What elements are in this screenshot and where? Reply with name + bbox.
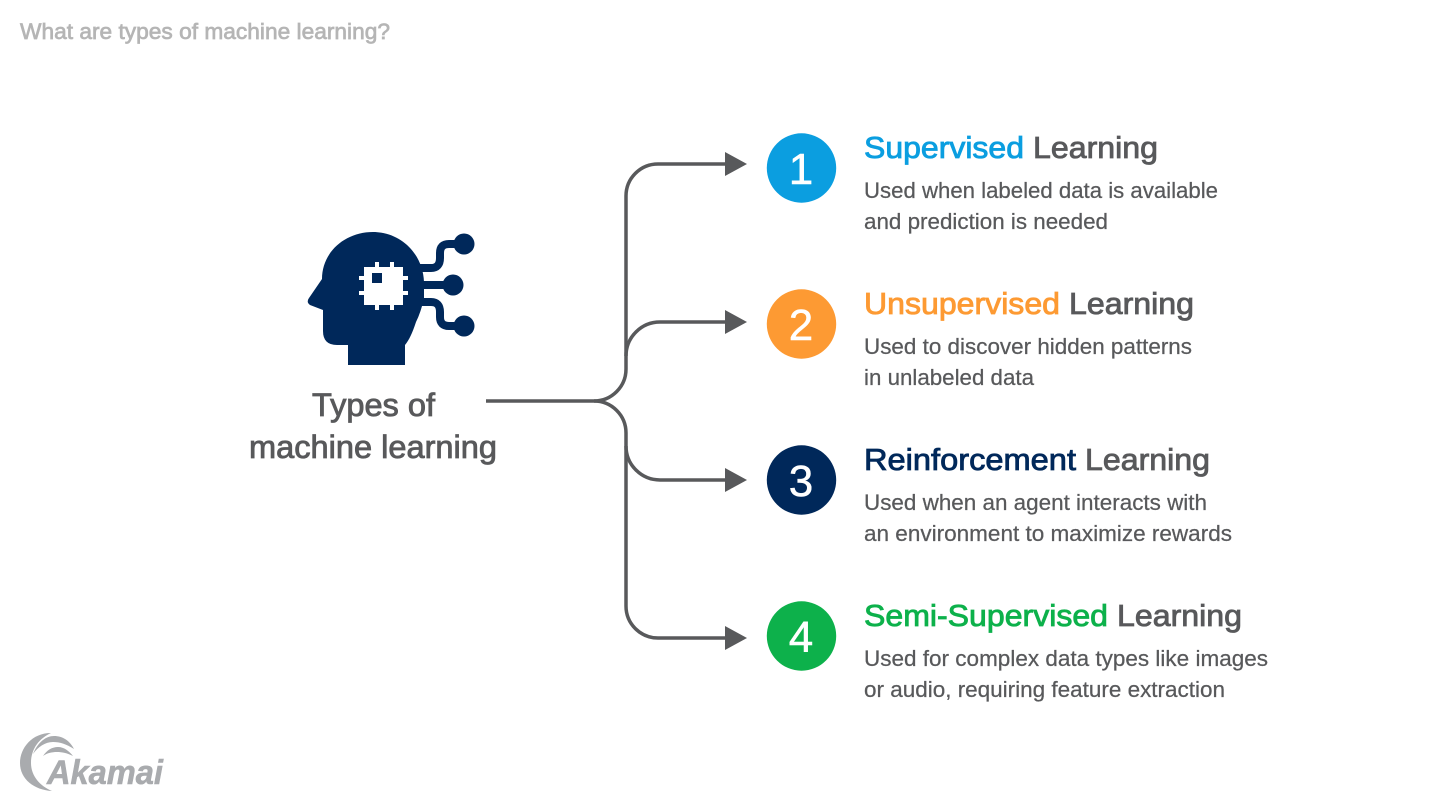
item 2: unsupervised learning: Used to discover hidden patterns	[864, 334, 1192, 359]
branching arrows	[486, 152, 747, 650]
item 4: semi-supervised learning: Learning	[1117, 598, 1242, 633]
central label: machine learning	[249, 429, 497, 465]
item 3: reinforcement learning: Used when an agent interacts with	[864, 490, 1207, 515]
item 3: reinforcement learning: 3	[789, 457, 813, 506]
Akamai logo: Akamai	[46, 754, 164, 792]
item 3: reinforcement learning	[767, 442, 1232, 546]
item 2: unsupervised learning: Learning	[1069, 286, 1194, 321]
item 1: supervised learning: 1	[789, 145, 813, 194]
item 4: semi-supervised learning: Used for complex data types like images	[864, 646, 1268, 671]
item 3: reinforcement learning: an environment to maximize rewards	[864, 521, 1232, 546]
central label: Types of	[312, 387, 435, 423]
item 1: supervised learning: Supervised	[864, 130, 1024, 165]
item 2: unsupervised learning	[767, 286, 1194, 390]
item 1: supervised learning	[767, 130, 1218, 234]
item 1: supervised learning: Used when labeled data is available	[864, 178, 1218, 203]
item 4: semi-supervised learning: Semi-Supervised	[864, 598, 1108, 633]
item 1: supervised learning: Learning	[1033, 130, 1158, 165]
item 4: semi-supervised learning	[767, 598, 1268, 702]
page title: What are types of machine learning?	[20, 19, 390, 44]
item 2: unsupervised learning: Unsupervised	[864, 286, 1060, 321]
central label	[249, 387, 497, 465]
item 4: semi-supervised learning: or audio, requiring feature extraction	[864, 677, 1225, 702]
icon: head with circuit	[308, 232, 474, 365]
item 2: unsupervised learning: in unlabeled data	[864, 365, 1034, 390]
item 4: semi-supervised learning: 4	[789, 613, 813, 662]
item 3: reinforcement learning: Reinforcement	[864, 442, 1076, 477]
item 3: reinforcement learning: Learning	[1085, 442, 1210, 477]
item 2: unsupervised learning: 2	[789, 301, 813, 350]
item 1: supervised learning: and prediction is needed	[864, 209, 1108, 234]
Akamai logo	[20, 733, 164, 792]
